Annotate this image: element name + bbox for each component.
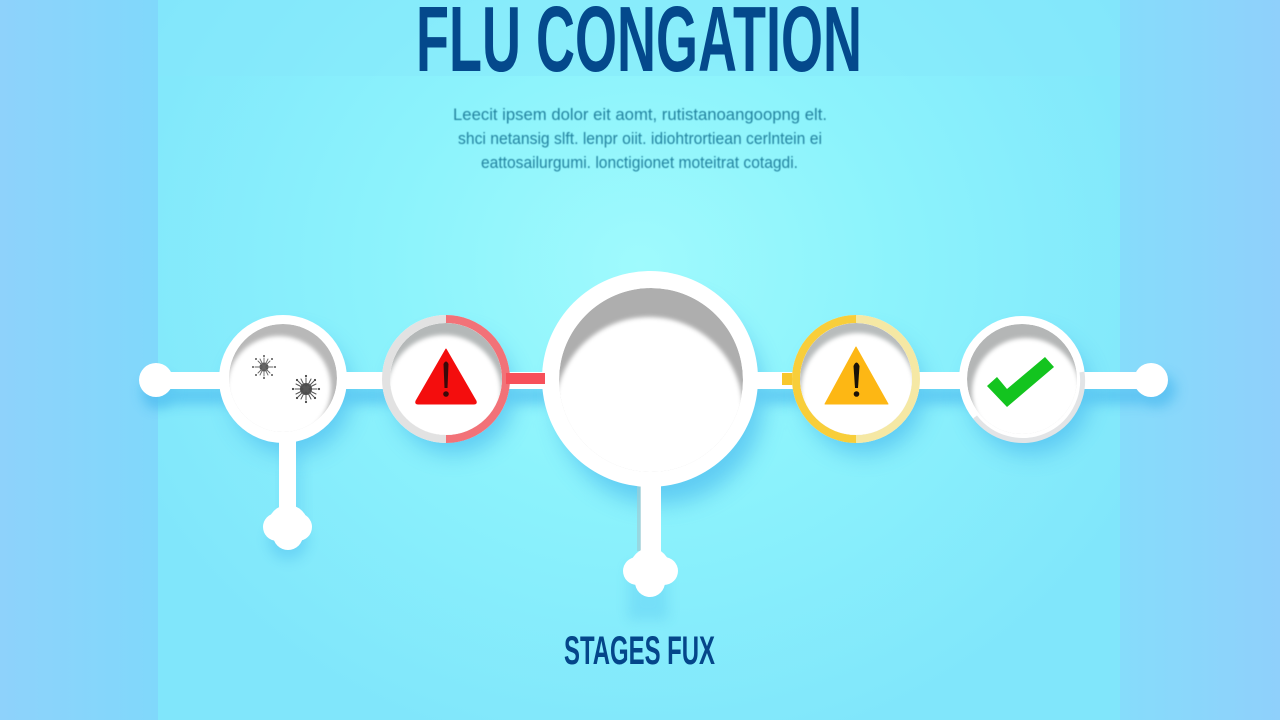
icon: virus particle small [252, 355, 276, 379]
icon: red warning triangle [416, 349, 476, 404]
connector: yellow tab [782, 373, 794, 385]
icon: amber warning triangle [825, 347, 888, 404]
stage 5: check mark circle [959, 316, 1085, 446]
icon: green check mark [987, 357, 1054, 407]
shadows of the timeline [142, 296, 1176, 620]
intro text block [453, 105, 827, 172]
stage 2: red warning circle [382, 315, 510, 449]
intro text block: shci netansig slft. lenpr oiit. idiohtrortiean cerlntein ei [458, 129, 822, 148]
stage 4: yellow warning circle [792, 315, 920, 447]
intro text block: Leecit ipsem dolor eit aomt, rutistanoangoopng elt. [453, 105, 827, 124]
left end node [139, 363, 173, 397]
right end node [1134, 363, 1168, 397]
connector: red segment [506, 373, 545, 384]
timeline line [139, 363, 1151, 397]
stage 3: large central circle [542, 271, 758, 597]
footer label: STAGES FUX [564, 629, 715, 673]
intro text block: eattosailurgumi. lonctigionet moteitrat cotagdi. [481, 153, 798, 172]
icon: virus particle large [292, 375, 320, 403]
stage 1: virus circle [219, 315, 347, 550]
